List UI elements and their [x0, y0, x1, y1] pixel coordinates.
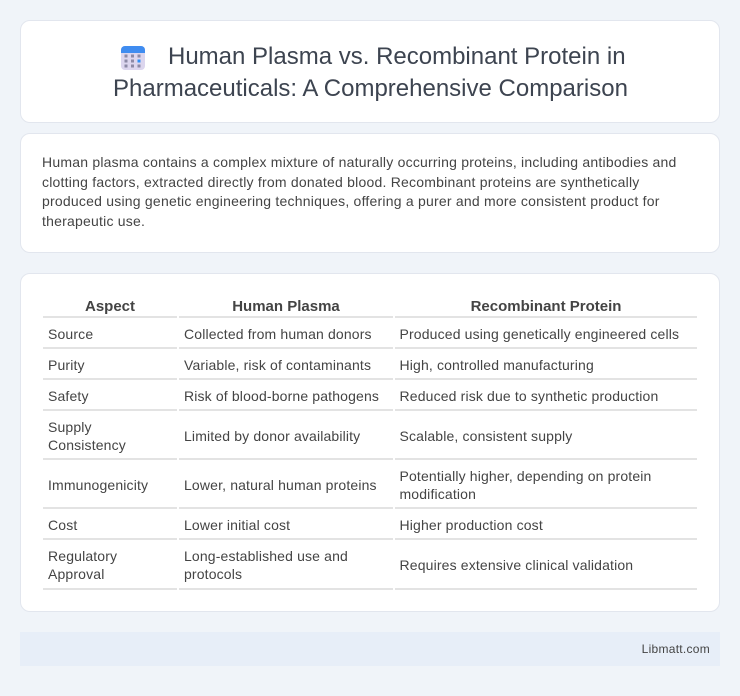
comparison table: Collected from human donors	[184, 326, 372, 342]
comparison table: Produced using genetically engineered cells	[400, 326, 679, 342]
comparison table: Limited by donor availability	[184, 428, 360, 444]
comparison table: Risk of blood-borne pathogens	[184, 388, 379, 404]
comparison table: Higher production cost	[400, 516, 543, 532]
comparison table: High, controlled manufacturing	[400, 356, 594, 372]
comparison table	[43, 298, 697, 590]
panel: title	[20, 20, 720, 123]
comparison table: Safety	[48, 388, 89, 404]
icon: calendar	[121, 46, 145, 70]
panel: summary text	[20, 133, 720, 253]
summary paragraph: therapeutic use.	[42, 212, 145, 228]
heading: Pharmaceuticals: A Comprehensive Comparison	[113, 75, 628, 102]
comparison table: protocols	[184, 566, 242, 582]
summary paragraph: produced using genetic engineering techniques, offering a purer and more consistent product for	[42, 193, 660, 209]
comparison table: Immunogenicity	[48, 476, 148, 492]
summary paragraph	[42, 154, 677, 229]
footer bar	[20, 632, 720, 666]
footer credit: Libmatt.com	[642, 642, 710, 656]
summary paragraph: Human plasma contains a complex mixture of naturally occurring proteins, including antibodies and	[42, 154, 677, 170]
comparison table: Recombinant Protein	[471, 298, 621, 315]
comparison table: Purity	[48, 356, 85, 372]
comparison table: Lower initial cost	[184, 516, 290, 532]
comparison table: modification	[400, 486, 476, 502]
panel: comparison table	[20, 273, 720, 612]
comparison table: Reduced risk due to synthetic production	[400, 388, 658, 404]
comparison table: Supply	[48, 418, 92, 434]
comparison table: Human Plasma	[232, 298, 340, 315]
comparison table: Lower, natural human proteins	[184, 476, 377, 492]
comparison table: Long-established use and	[184, 548, 348, 564]
comparison table: Regulatory	[48, 548, 117, 564]
comparison table: Approval	[48, 566, 104, 582]
summary paragraph: clotting factors, extracted directly from donated blood. Recombinant proteins are synthetically	[42, 174, 640, 190]
comparison table: Source	[48, 326, 93, 342]
comparison table: Cost	[48, 516, 77, 532]
heading	[113, 43, 628, 102]
comparison table: Variable, risk of contaminants	[184, 356, 371, 372]
comparison table: Aspect	[85, 298, 135, 315]
comparison table: Scalable, consistent supply	[400, 428, 572, 444]
comparison table: Consistency	[48, 436, 126, 452]
comparison table: Potentially higher, depending on protein	[400, 468, 651, 484]
comparison table: Requires extensive clinical validation	[400, 557, 633, 573]
heading: Human Plasma vs. Recombinant Protein in	[168, 43, 626, 70]
